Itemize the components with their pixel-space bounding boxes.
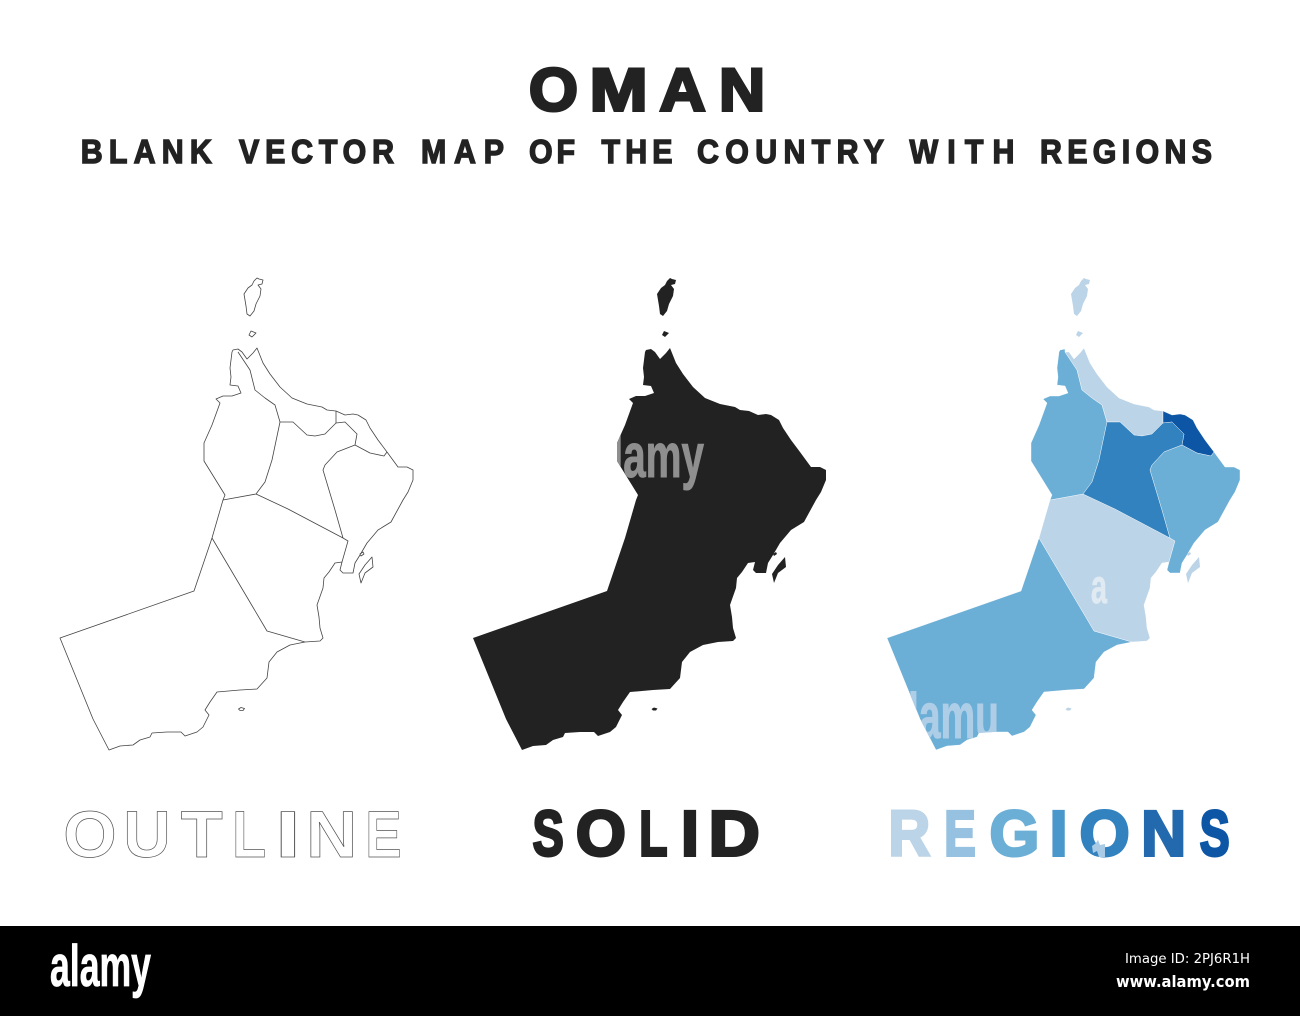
subtitle: COUNTRY	[697, 133, 884, 170]
region: Muscat	[1163, 411, 1214, 456]
map: solid	[473, 278, 826, 750]
label: outline: U	[123, 797, 171, 871]
title: A	[660, 56, 706, 124]
title: N	[719, 56, 765, 124]
label: regions: O	[1080, 798, 1130, 870]
label: outline: O	[63, 797, 117, 871]
watermark fragment on letter O	[1092, 840, 1105, 857]
label: solid: I	[681, 798, 699, 870]
watermark on regions map: lamu	[908, 680, 999, 752]
islands	[1066, 278, 1200, 710]
subtitle: REGIONS	[1040, 133, 1212, 170]
region: Al Wusta	[1039, 494, 1175, 642]
watermark on solid map: lamy	[612, 422, 704, 491]
footer band	[0, 926, 1300, 1016]
footer image id: Image ID: 2PJ6R1H	[1125, 951, 1250, 967]
label: regions: G	[990, 798, 1039, 870]
subtitle: VECTOR	[239, 133, 394, 170]
subtitle: BLANK	[81, 133, 212, 170]
label: regions: R	[888, 798, 930, 870]
watermark on regions map: a	[1091, 561, 1107, 614]
label: regions: S	[1200, 798, 1230, 870]
subtitle: MAP	[421, 133, 504, 170]
label: regions: I	[1050, 798, 1068, 870]
region: Al Batinah	[1065, 348, 1163, 436]
watermark on regions map	[910, 576, 1108, 739]
label: outline: N	[306, 797, 357, 871]
label: solid: S	[533, 798, 564, 870]
footer logo: alamy	[50, 934, 151, 999]
region: Ash Sharqiyah	[1150, 445, 1240, 573]
label: regions: N	[1141, 798, 1186, 870]
title: O	[529, 56, 578, 124]
label: outline: L	[232, 797, 266, 871]
subtitle: THE	[601, 133, 673, 170]
title: M	[590, 56, 648, 124]
region: Al Dhahirah	[1031, 349, 1107, 500]
region: Ad Dakhiliyah	[1083, 422, 1184, 538]
label: solid: L	[639, 798, 668, 870]
subtitle: OF	[529, 133, 575, 170]
label: solid: D	[708, 798, 760, 870]
label: outline: E	[365, 797, 402, 871]
label: outline: I	[275, 797, 301, 871]
label: outline: T	[181, 797, 223, 871]
region: Dhofar	[887, 538, 1132, 750]
label: solid: O	[576, 798, 626, 870]
label: regions: E	[944, 798, 976, 870]
footer url: www.alamy.com	[1116, 972, 1250, 991]
map: regions	[887, 278, 1240, 750]
subtitle: WITH	[910, 133, 1014, 170]
map: outline	[60, 278, 413, 750]
